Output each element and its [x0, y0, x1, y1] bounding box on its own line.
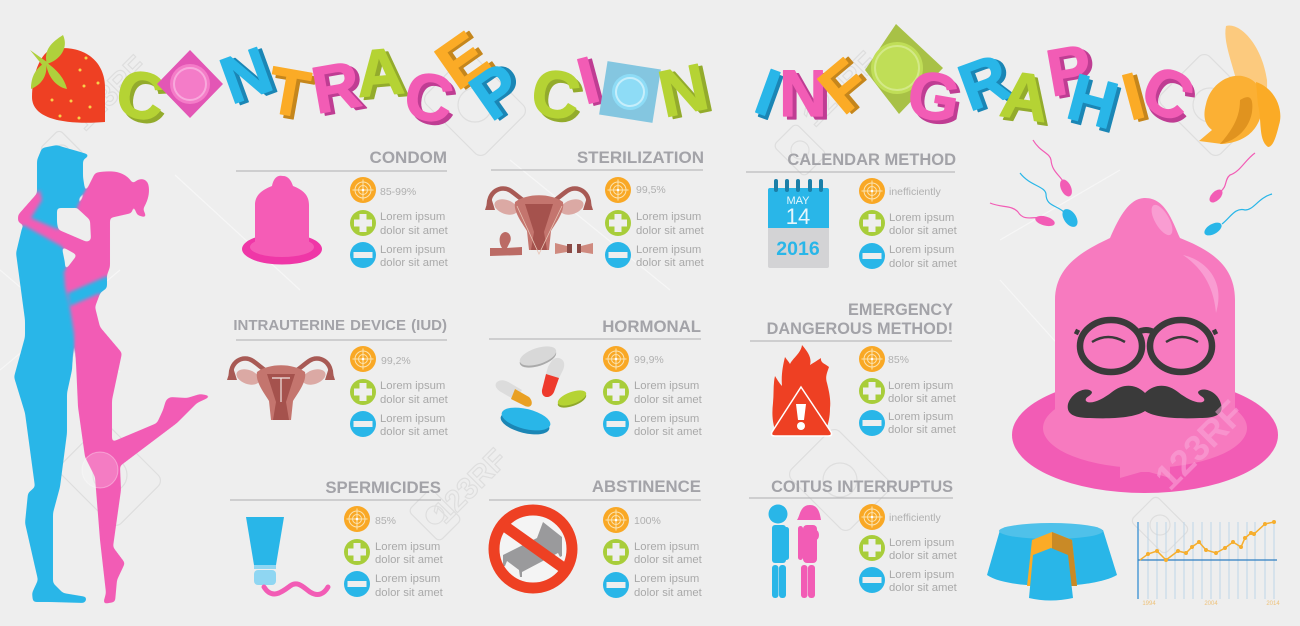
stats: Lorem ipsum — [634, 380, 699, 392]
woman silhouette — [18, 171, 212, 604]
title: CONTRACEPCION: P — [457, 48, 535, 134]
title: INFOGRAPHIC: R — [954, 41, 1024, 126]
title: CONTRACEPCION: C — [403, 60, 462, 141]
icon: uterus with IUD — [227, 358, 335, 420]
stats: dolor sit amet — [380, 426, 449, 438]
heading: ABSTINENCE — [592, 477, 701, 496]
title: CONTRACEPCION: C — [113, 58, 175, 140]
title: INFOGRAPHIC: R — [949, 39, 1019, 125]
watermark: 123RF — [797, 46, 884, 133]
heading: STERILIZATION — [577, 148, 704, 167]
icon: pills — [496, 343, 588, 439]
stats: 99,5% — [636, 184, 666, 196]
title: CONTRACEPCION: N — [657, 51, 719, 133]
line chart — [1138, 520, 1280, 607]
title: INFOGRAPHIC: G — [906, 59, 969, 141]
title: CONTRACEPCION — [109, 15, 719, 141]
watermark over couple — [82, 452, 118, 488]
stats: dolor sit amet — [634, 554, 703, 566]
watermark: 123RF — [427, 443, 514, 530]
title: INFOGRAPHIC: C — [1133, 54, 1208, 141]
stats: 100% — [634, 515, 661, 527]
stats: Lorem ipsum — [380, 380, 445, 392]
title: INFOGRAPHIC — [746, 24, 1209, 147]
stats: dolor sit amet — [888, 393, 957, 405]
stats: Lorem ipsum — [888, 380, 953, 392]
heading: INTRAUTERINE DEVICE (IUD) — [233, 317, 447, 334]
title: CONTRACEPCION: T — [266, 56, 319, 136]
title: CONTRACEPCION: C — [110, 54, 172, 136]
stats: dolor sit amet — [375, 587, 444, 599]
stats: Lorem ipsum — [380, 244, 445, 256]
icon: tube — [246, 517, 328, 594]
title: CONTRACEPCION: A — [353, 33, 407, 111]
title: INFOGRAPHIC: F — [810, 44, 888, 127]
stats: dolor sit amet — [380, 394, 449, 406]
title: CONTRACEPCION: E — [428, 17, 506, 103]
stats: Lorem ipsum — [634, 573, 699, 585]
illustration: sperm — [990, 140, 1272, 238]
icon: flame warning — [771, 345, 832, 436]
stats — [603, 507, 703, 599]
icon: calendar: 14 — [786, 204, 810, 229]
highlights — [1147, 202, 1219, 313]
stats: Lorem ipsum — [636, 244, 701, 256]
heading: COITUS INTERRUPTUS — [771, 478, 953, 496]
heading: HORMONAL — [602, 317, 701, 336]
body — [1043, 198, 1247, 468]
title: CONTRACEPCION: A — [357, 36, 411, 114]
icon: blue cap with orange cut-out — [987, 523, 1117, 600]
title: INFOGRAPHIC: H — [1063, 63, 1129, 147]
icon: green condom packet letter O — [865, 24, 943, 114]
stats: 99,2% — [381, 355, 411, 367]
title: INFOGRAPHIC: I — [747, 54, 789, 130]
title: CONTRACEPCION: P — [462, 48, 540, 134]
stats: dolor sit amet — [889, 550, 958, 562]
illustration: kissing couple — [14, 145, 212, 604]
panel: emergency dangerous method — [750, 301, 957, 436]
panel: spermicides — [230, 478, 444, 599]
title: CONTRACEPCION: T — [263, 52, 315, 132]
stats: Lorem ipsum — [634, 413, 699, 425]
icon: calendar: MAY — [786, 195, 810, 207]
stats: dolor sit amet — [636, 225, 705, 237]
man's arm — [68, 276, 107, 306]
stats: inefficiently — [889, 512, 942, 524]
title: INFOGRAPHIC: F — [805, 45, 883, 127]
stats: Lorem ipsum — [380, 211, 445, 223]
stats: dolor sit amet — [634, 426, 703, 438]
brim — [1012, 377, 1278, 493]
icon: calendar — [768, 179, 829, 268]
icon: banana — [1199, 26, 1280, 147]
stats — [350, 177, 449, 269]
title: INFOGRAPHIC: G — [902, 55, 966, 137]
bow tie — [1120, 459, 1170, 478]
stats — [859, 178, 958, 270]
stats — [350, 346, 449, 438]
heading: CONDOM — [370, 148, 447, 167]
title: INFOGRAPHIC: N — [783, 59, 831, 133]
icon: separated man and woman — [768, 504, 821, 598]
stats: dolor sit amet — [380, 225, 449, 237]
stats: 85% — [375, 515, 396, 527]
stats: 85% — [888, 354, 909, 366]
stats: dolor sit amet — [375, 554, 444, 566]
heading: SPERMICIDES — [325, 478, 441, 497]
panel: abstinence — [489, 477, 703, 599]
title: CONTRACEPCION: I — [570, 42, 606, 118]
icon: calendar: 2016 — [776, 238, 820, 260]
stats: Lorem ipsum — [375, 541, 440, 553]
stats: Lorem ipsum — [636, 211, 701, 223]
title: INFOGRAPHIC: H — [1060, 59, 1126, 143]
illustration: condom character — [1012, 198, 1278, 498]
stats: dolor sit amet — [380, 257, 449, 269]
stats — [344, 506, 444, 599]
title: CONTRACEPCION: C — [399, 56, 459, 138]
watermark: 123RF — [67, 50, 154, 137]
icon: strawberry — [30, 35, 105, 123]
watermark — [0, 46, 1264, 555]
title: CONTRACEPCION: R — [311, 49, 370, 130]
stats: Lorem ipsum — [889, 569, 954, 581]
stats: Lorem ipsum — [380, 413, 445, 425]
stats: dolor sit amet — [636, 257, 705, 269]
title: INFOGRAPHIC: I — [1119, 60, 1156, 136]
icon: uterus with cut tubes — [485, 188, 593, 256]
stats: Lorem ipsum — [889, 244, 954, 256]
stats: inefficiently — [889, 186, 942, 198]
stats: Lorem ipsum — [375, 573, 440, 585]
panel: hormonal — [489, 317, 703, 439]
stats — [859, 346, 957, 436]
title: CONTRACEPCION: R — [306, 46, 366, 128]
icon: blue condom packet letter O — [599, 61, 661, 123]
stats: dolor sit amet — [889, 582, 958, 594]
title: CONTRACEPCION: N — [216, 34, 286, 119]
icon: no bed sign — [489, 505, 577, 593]
title: CONTRACEPCION: I — [574, 44, 611, 120]
icon: condom — [242, 176, 322, 264]
stats: Lorem ipsum — [889, 537, 954, 549]
line chart: 1994 — [1142, 601, 1156, 607]
heading — [767, 301, 953, 338]
line chart: 2004 — [1204, 601, 1218, 607]
stats: Lorem ipsum — [888, 411, 953, 423]
title: INFOGRAPHIC: P — [1045, 32, 1102, 113]
panel: intrauterine device — [227, 317, 449, 438]
stats: dolor sit amet — [889, 258, 958, 270]
man silhouette — [14, 145, 90, 603]
line chart: 2014 — [1266, 601, 1280, 607]
stats: Lorem ipsum — [634, 541, 699, 553]
title: CONTRACEPCION: C — [530, 57, 589, 138]
stats: dolor sit amet — [889, 225, 958, 237]
glasses — [1075, 320, 1217, 372]
stats: 99,9% — [634, 354, 664, 366]
title: CONTRACEPCION: N — [652, 49, 714, 131]
title: INFOGRAPHIC: A — [996, 56, 1054, 136]
title: CONTRACEPCION: E — [423, 17, 501, 103]
title: INFOGRAPHIC: N — [779, 56, 827, 130]
moustache — [1068, 386, 1222, 418]
title: INFOGRAPHIC: I — [1115, 58, 1151, 134]
panel: calendar method — [746, 151, 958, 270]
title: CONTRACEPCION: C — [526, 53, 586, 135]
stats: dolor sit amet — [888, 424, 957, 436]
title: INFOGRAPHIC: I — [749, 58, 792, 134]
panel: condom — [236, 148, 449, 269]
title: INFOGRAPHIC: P — [1041, 30, 1097, 110]
title: INFOGRAPHIC: C — [1131, 49, 1205, 137]
icon: pink condom packet letter O — [157, 50, 223, 118]
heading: DANGEROUS METHOD! — [767, 320, 953, 338]
title: INFOGRAPHIC: A — [1000, 60, 1057, 139]
stats — [603, 346, 703, 438]
panel: sterilization — [485, 148, 705, 269]
stats: Lorem ipsum — [889, 212, 954, 224]
heading: CALENDAR METHOD — [787, 151, 956, 169]
stats: dolor sit amet — [634, 394, 703, 406]
stats: 85-99% — [380, 186, 416, 198]
stats — [605, 177, 705, 269]
heading: EMERGENCY — [848, 301, 953, 319]
panel: coitus interruptus — [749, 478, 958, 598]
title: CONTRACEPCION: N — [211, 32, 281, 118]
watermark text: 123RF — [1147, 392, 1252, 498]
stats — [859, 504, 958, 594]
stats: dolor sit amet — [634, 587, 703, 599]
